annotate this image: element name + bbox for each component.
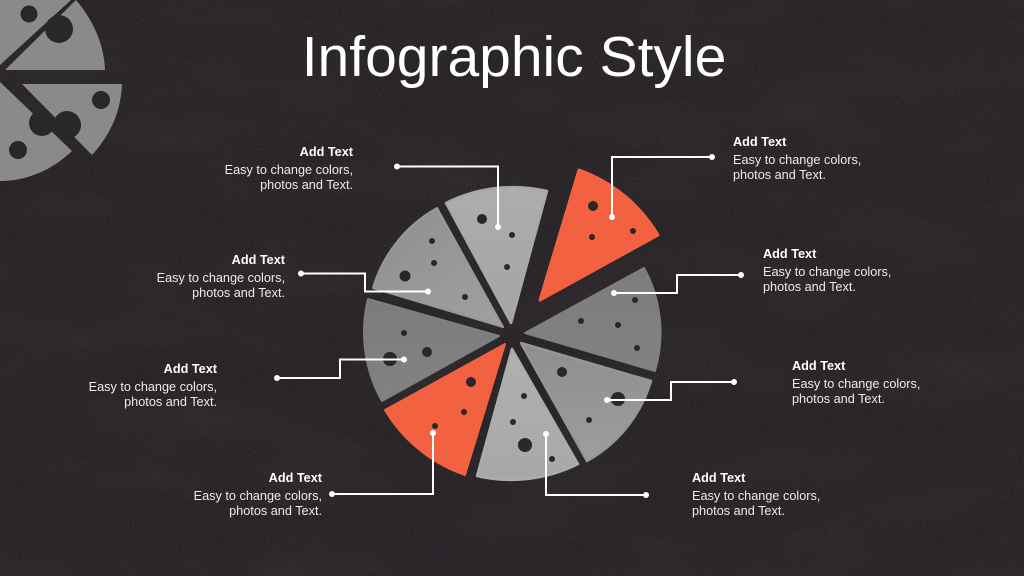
slice: top <box>446 187 547 323</box>
slice: lower left orange <box>385 344 505 475</box>
label: right: Easy to change colors, <box>792 377 920 391</box>
connector lines <box>274 154 744 498</box>
label: lower right: photos and Text. <box>692 504 785 518</box>
slice: lower right <box>521 343 651 461</box>
icon: corner pizza slices decoration <box>0 0 122 181</box>
label: top left: photos and Text. <box>260 178 353 192</box>
title: Infographic Style <box>302 25 726 89</box>
label: lower left <box>194 471 322 518</box>
label: right: photos and Text. <box>792 392 885 406</box>
label: lower left: photos and Text. <box>229 504 322 518</box>
label: upper left: Easy to change colors, <box>157 271 285 285</box>
label: upper right <box>763 247 891 294</box>
label: top left <box>225 145 353 192</box>
label: left: photos and Text. <box>124 395 217 409</box>
label: left <box>89 362 217 409</box>
pizza infographic chart <box>364 170 661 480</box>
slice: upper left <box>373 208 503 327</box>
label: lower left: Add Text <box>269 471 322 485</box>
label: upper right: Add Text <box>763 247 816 261</box>
label: lower right <box>692 471 820 518</box>
label: upper right: Easy to change colors, <box>763 265 891 279</box>
label: right: Add Text <box>792 359 845 373</box>
label: top right: photos and Text. <box>733 168 826 182</box>
label: upper left <box>157 253 285 300</box>
label: lower left: Easy to change colors, <box>194 489 322 503</box>
label: lower right: Easy to change colors, <box>692 489 820 503</box>
slice: bottom <box>477 349 578 480</box>
label: top left: Add Text <box>300 145 353 159</box>
label: lower right: Add Text <box>692 471 745 485</box>
slice: right <box>525 268 661 371</box>
label: right <box>792 359 920 406</box>
label: left: Easy to change colors, <box>89 380 217 394</box>
slice: top right orange <box>540 170 658 300</box>
label: top right: Easy to change colors, <box>733 153 861 167</box>
label: top left: Easy to change colors, <box>225 163 353 177</box>
label: upper left: Add Text <box>232 253 285 267</box>
label: top right <box>733 135 861 182</box>
label: upper right: photos and Text. <box>763 280 856 294</box>
label: left: Add Text <box>164 362 217 376</box>
label: upper left: photos and Text. <box>192 286 285 300</box>
slice: left <box>364 299 499 401</box>
label: top right: Add Text <box>733 135 786 149</box>
